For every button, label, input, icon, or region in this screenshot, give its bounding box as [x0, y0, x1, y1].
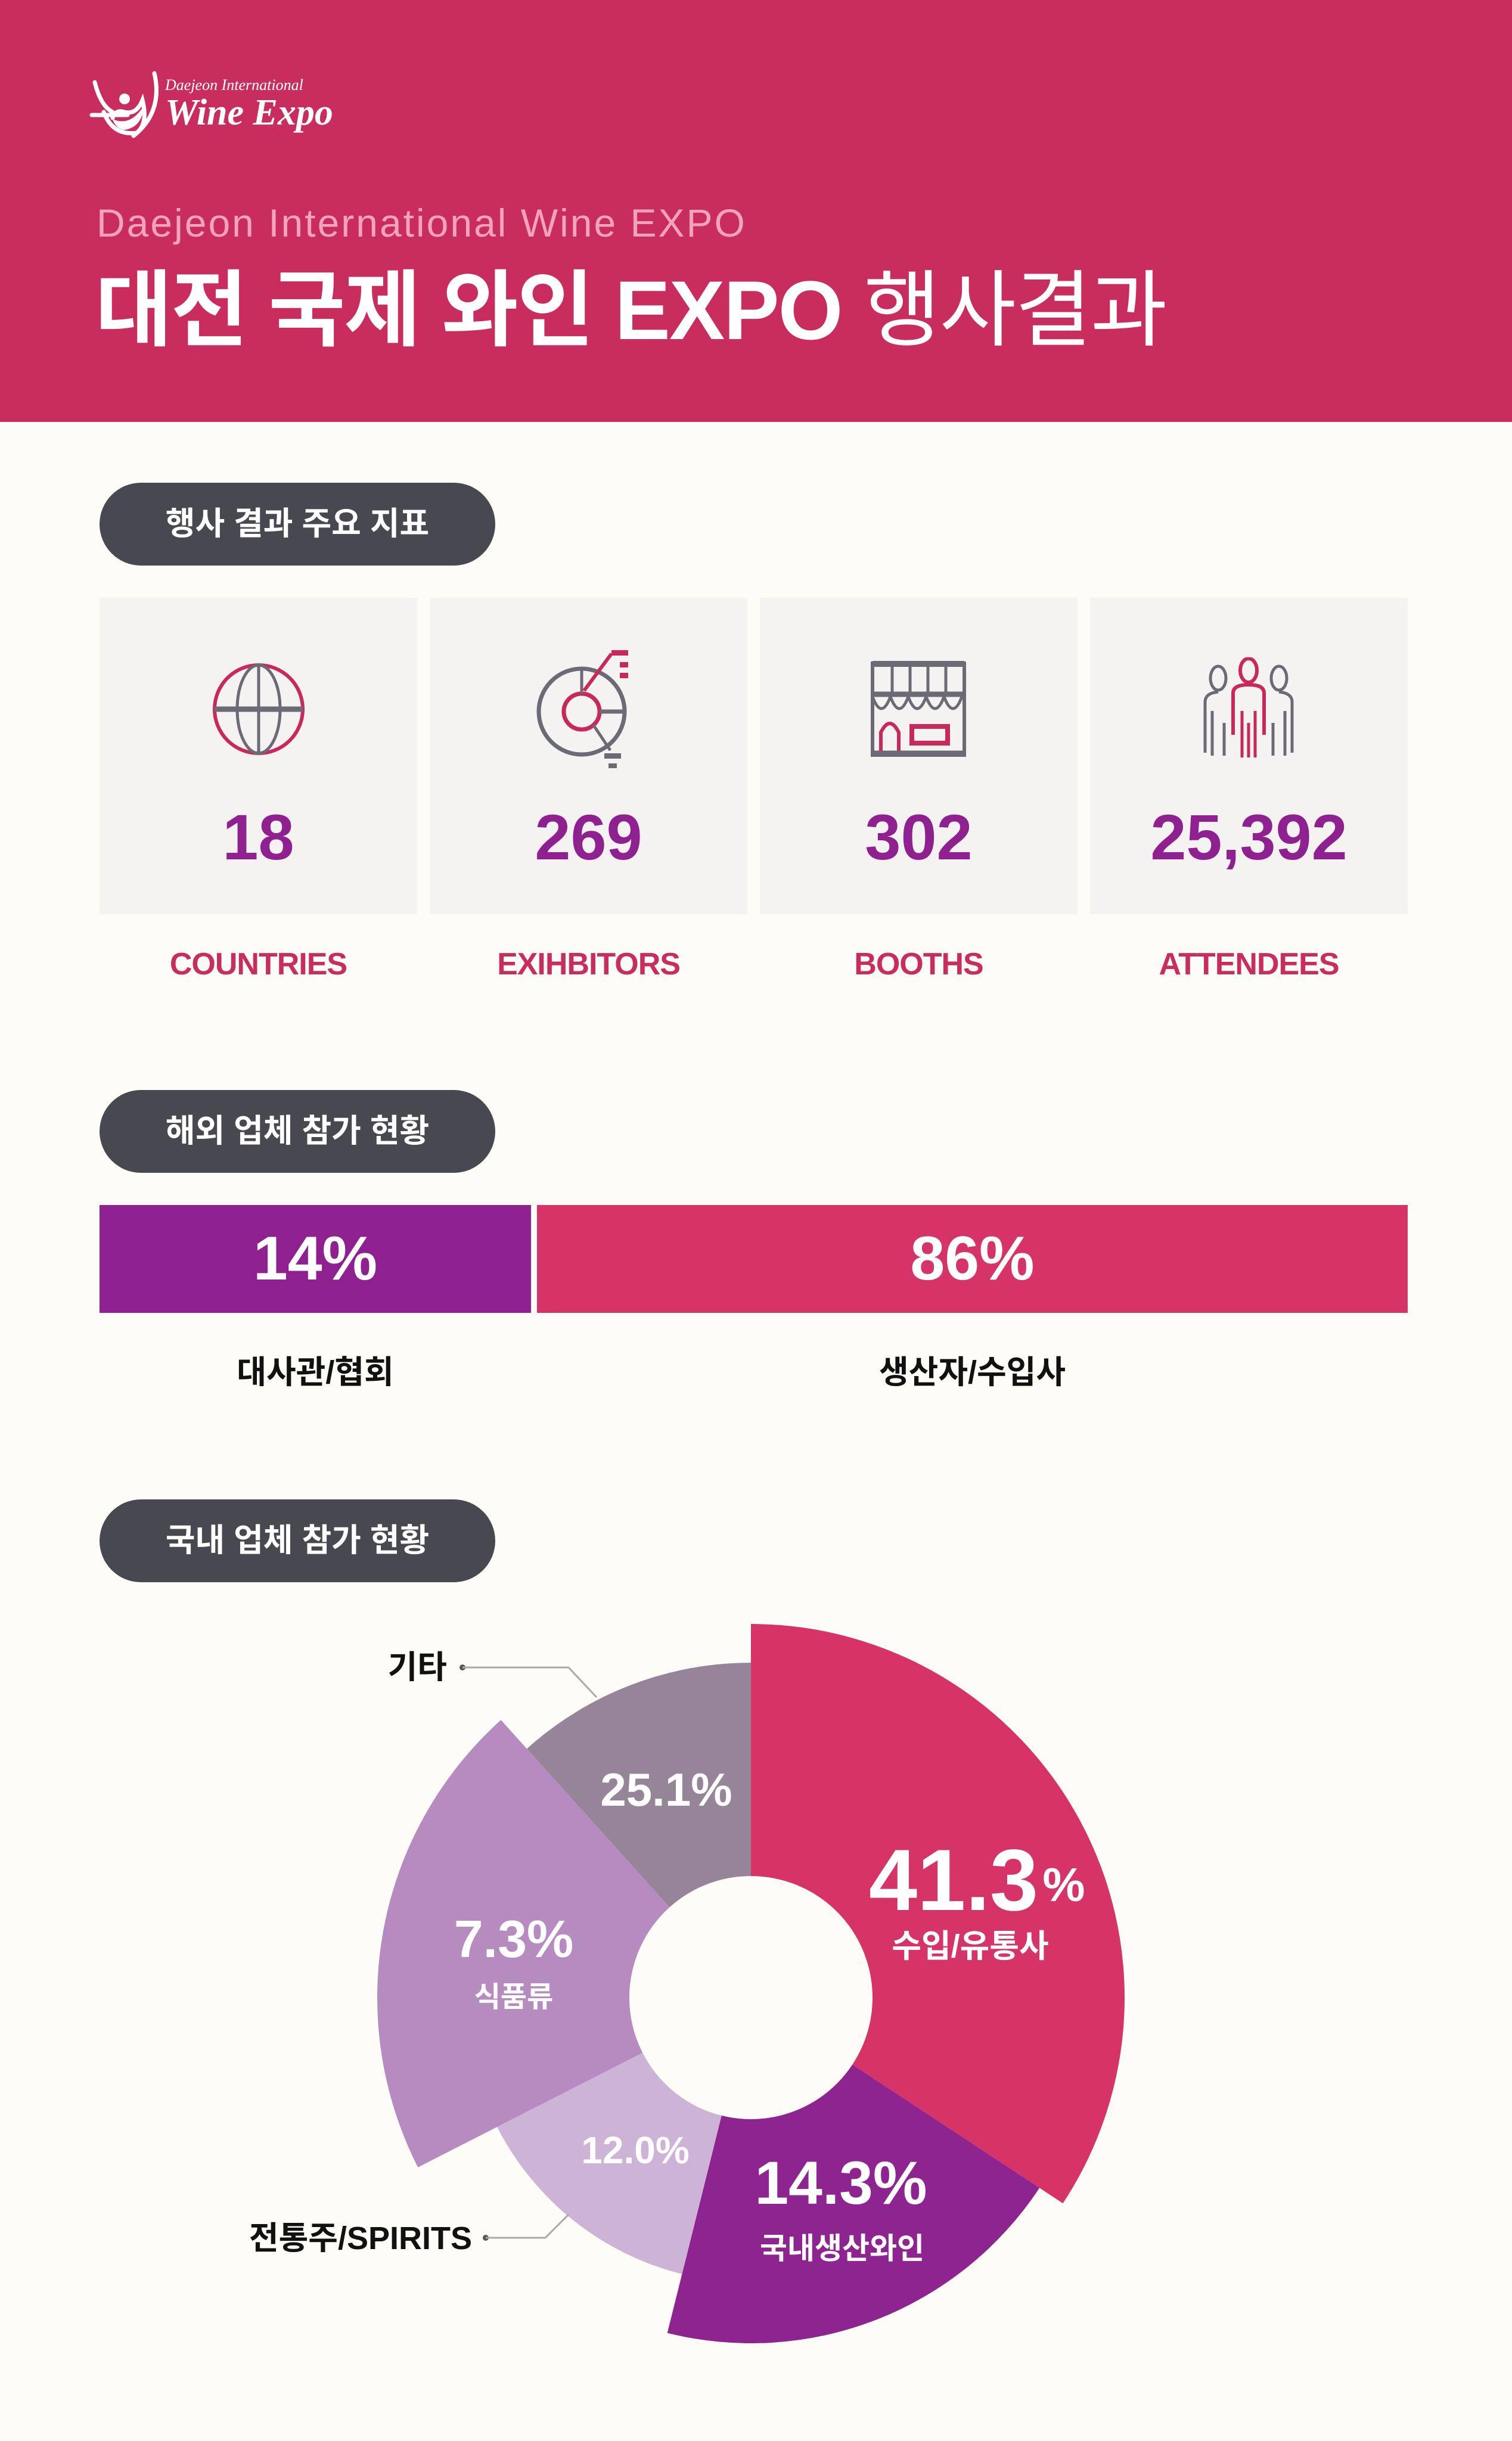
bar: producers 86%: 86% — [910, 1224, 1035, 1293]
panel: countries — [100, 598, 417, 914]
header banner — [0, 0, 1512, 422]
pill: overseas participation: 해외 업체 참가 현황 — [166, 1113, 429, 1149]
segment: spirits 12.0% — [497, 2053, 722, 2274]
icon: magnifier chart — [536, 650, 628, 768]
bar: producers 86% — [537, 1205, 1408, 1313]
icon: people — [1204, 657, 1293, 757]
label: embassies: 대사관/협회 — [237, 1355, 394, 1390]
label: booths: BOOTHS — [854, 947, 983, 982]
label: producers: 생산자/수입사 — [879, 1355, 1066, 1390]
bar chart: overseas — [100, 1205, 1408, 1313]
pill: overseas participation — [100, 1090, 495, 1173]
number: 302 — [865, 801, 973, 873]
value: 7.3%: 7.3% — [454, 1909, 573, 1968]
segment: domestic wine 14.3% — [667, 2064, 1039, 2343]
value: 41.3%: % — [1042, 1858, 1085, 1911]
logo: Daejeon International — [165, 76, 303, 94]
pill: domestic participation: 국내 업체 참가 현황 — [166, 1523, 429, 1558]
callout: spirits: 전통주/SPIRITS — [249, 2220, 472, 2256]
logo: Wine Expo — [165, 92, 333, 133]
number: 269 — [535, 801, 642, 873]
callout line: spirits — [483, 2215, 569, 2241]
pill: key indicators — [100, 483, 495, 566]
callout: other: 기타 — [388, 1650, 447, 1685]
panel: exhibitors — [430, 598, 747, 914]
label: food: 식품류 — [474, 1982, 553, 2013]
pill: domestic participation — [100, 1499, 495, 1582]
pill: key indicators: 행사 결과 주요 지표 — [166, 506, 429, 542]
value: 41.3%: 41.3 — [869, 1831, 1038, 1928]
title: 대전 국제 와인 EXPO 행사결과 — [95, 263, 1166, 357]
panel: attendees — [1090, 598, 1408, 914]
number: 18 — [222, 801, 294, 873]
segment: food 7.3% — [377, 1720, 670, 2167]
bar: embassies 14%: 14% — [253, 1224, 377, 1293]
segment: other 25.1% — [527, 1663, 751, 1907]
segment: importers 41.3% — [751, 1624, 1125, 2203]
callout line: other — [460, 1664, 597, 1697]
subtitle: Daejeon International Wine EXPO — [97, 201, 747, 245]
panel: booths — [760, 598, 1078, 914]
label: domestic wine: 국내생산와인 — [760, 2232, 924, 2265]
bar: embassies 14% — [100, 1205, 531, 1313]
icon: booth — [871, 661, 966, 757]
number: 25,392 — [1150, 801, 1348, 873]
value: 25.1%: 25.1% — [600, 1763, 732, 1816]
label: countries: COUNTRIES — [170, 947, 347, 982]
logo — [89, 72, 333, 138]
value: 12.0%: 12.0% — [581, 2129, 690, 2172]
label: importers: 수입/유통사 — [892, 1928, 1049, 1964]
label: attendees: ATTENDEES — [1159, 947, 1339, 982]
label: exhibitors: EXIHBITORS — [497, 947, 680, 982]
value: 14.3%: 14.3% — [755, 2149, 927, 2217]
icon: globe — [213, 663, 305, 755]
